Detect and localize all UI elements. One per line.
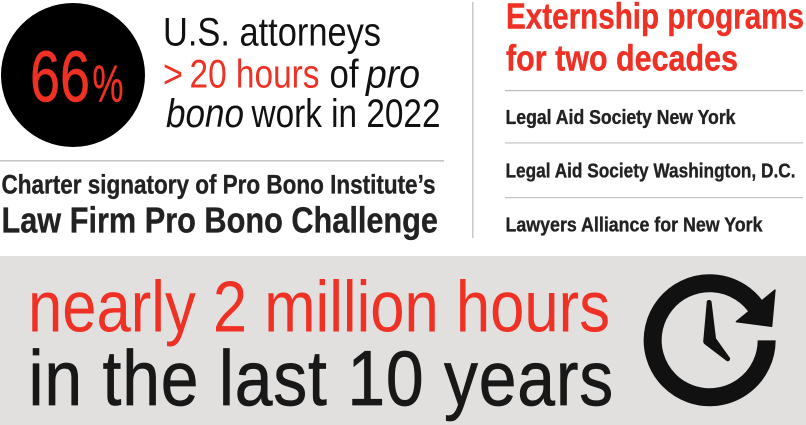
text: greater than sign: > xyxy=(163,52,183,96)
list item: Legal Aid Society New York: Legal Aid Society New York xyxy=(506,107,736,129)
text: U.S. attorneys: U.S. attorneys xyxy=(163,10,381,54)
text: charter signatory: Charter signatory of Pro Bono Institute’s xyxy=(2,170,436,200)
headline: nearly 2 million hours: nearly 2 million hours xyxy=(28,268,610,348)
icon: clock with circular arrow xyxy=(653,283,775,397)
list item: Lawyers Alliance for New York: Lawyers Alliance for New York xyxy=(506,215,763,237)
text: work in 2022: work in 2022 xyxy=(251,92,440,136)
panel: externship programs xyxy=(505,0,804,237)
panel: hours banner xyxy=(0,256,806,425)
panel: 66% statistic xyxy=(1,3,440,147)
black circle with 66% xyxy=(1,3,145,147)
black circle with 66%: 66 xyxy=(30,38,90,118)
text: of: of xyxy=(330,52,359,96)
text: bono: bono xyxy=(166,92,244,136)
text: 20 hours: 20 hours xyxy=(190,52,320,96)
text: pro: pro xyxy=(365,52,420,96)
text: Law Firm Pro Bono Challenge: Law Firm Pro Bono Challenge xyxy=(2,200,438,240)
black circle with 66%: % xyxy=(92,56,124,114)
heading: for two decades: for two decades xyxy=(506,38,738,79)
headline: in the last 10 years: in the last 10 years xyxy=(28,336,613,422)
